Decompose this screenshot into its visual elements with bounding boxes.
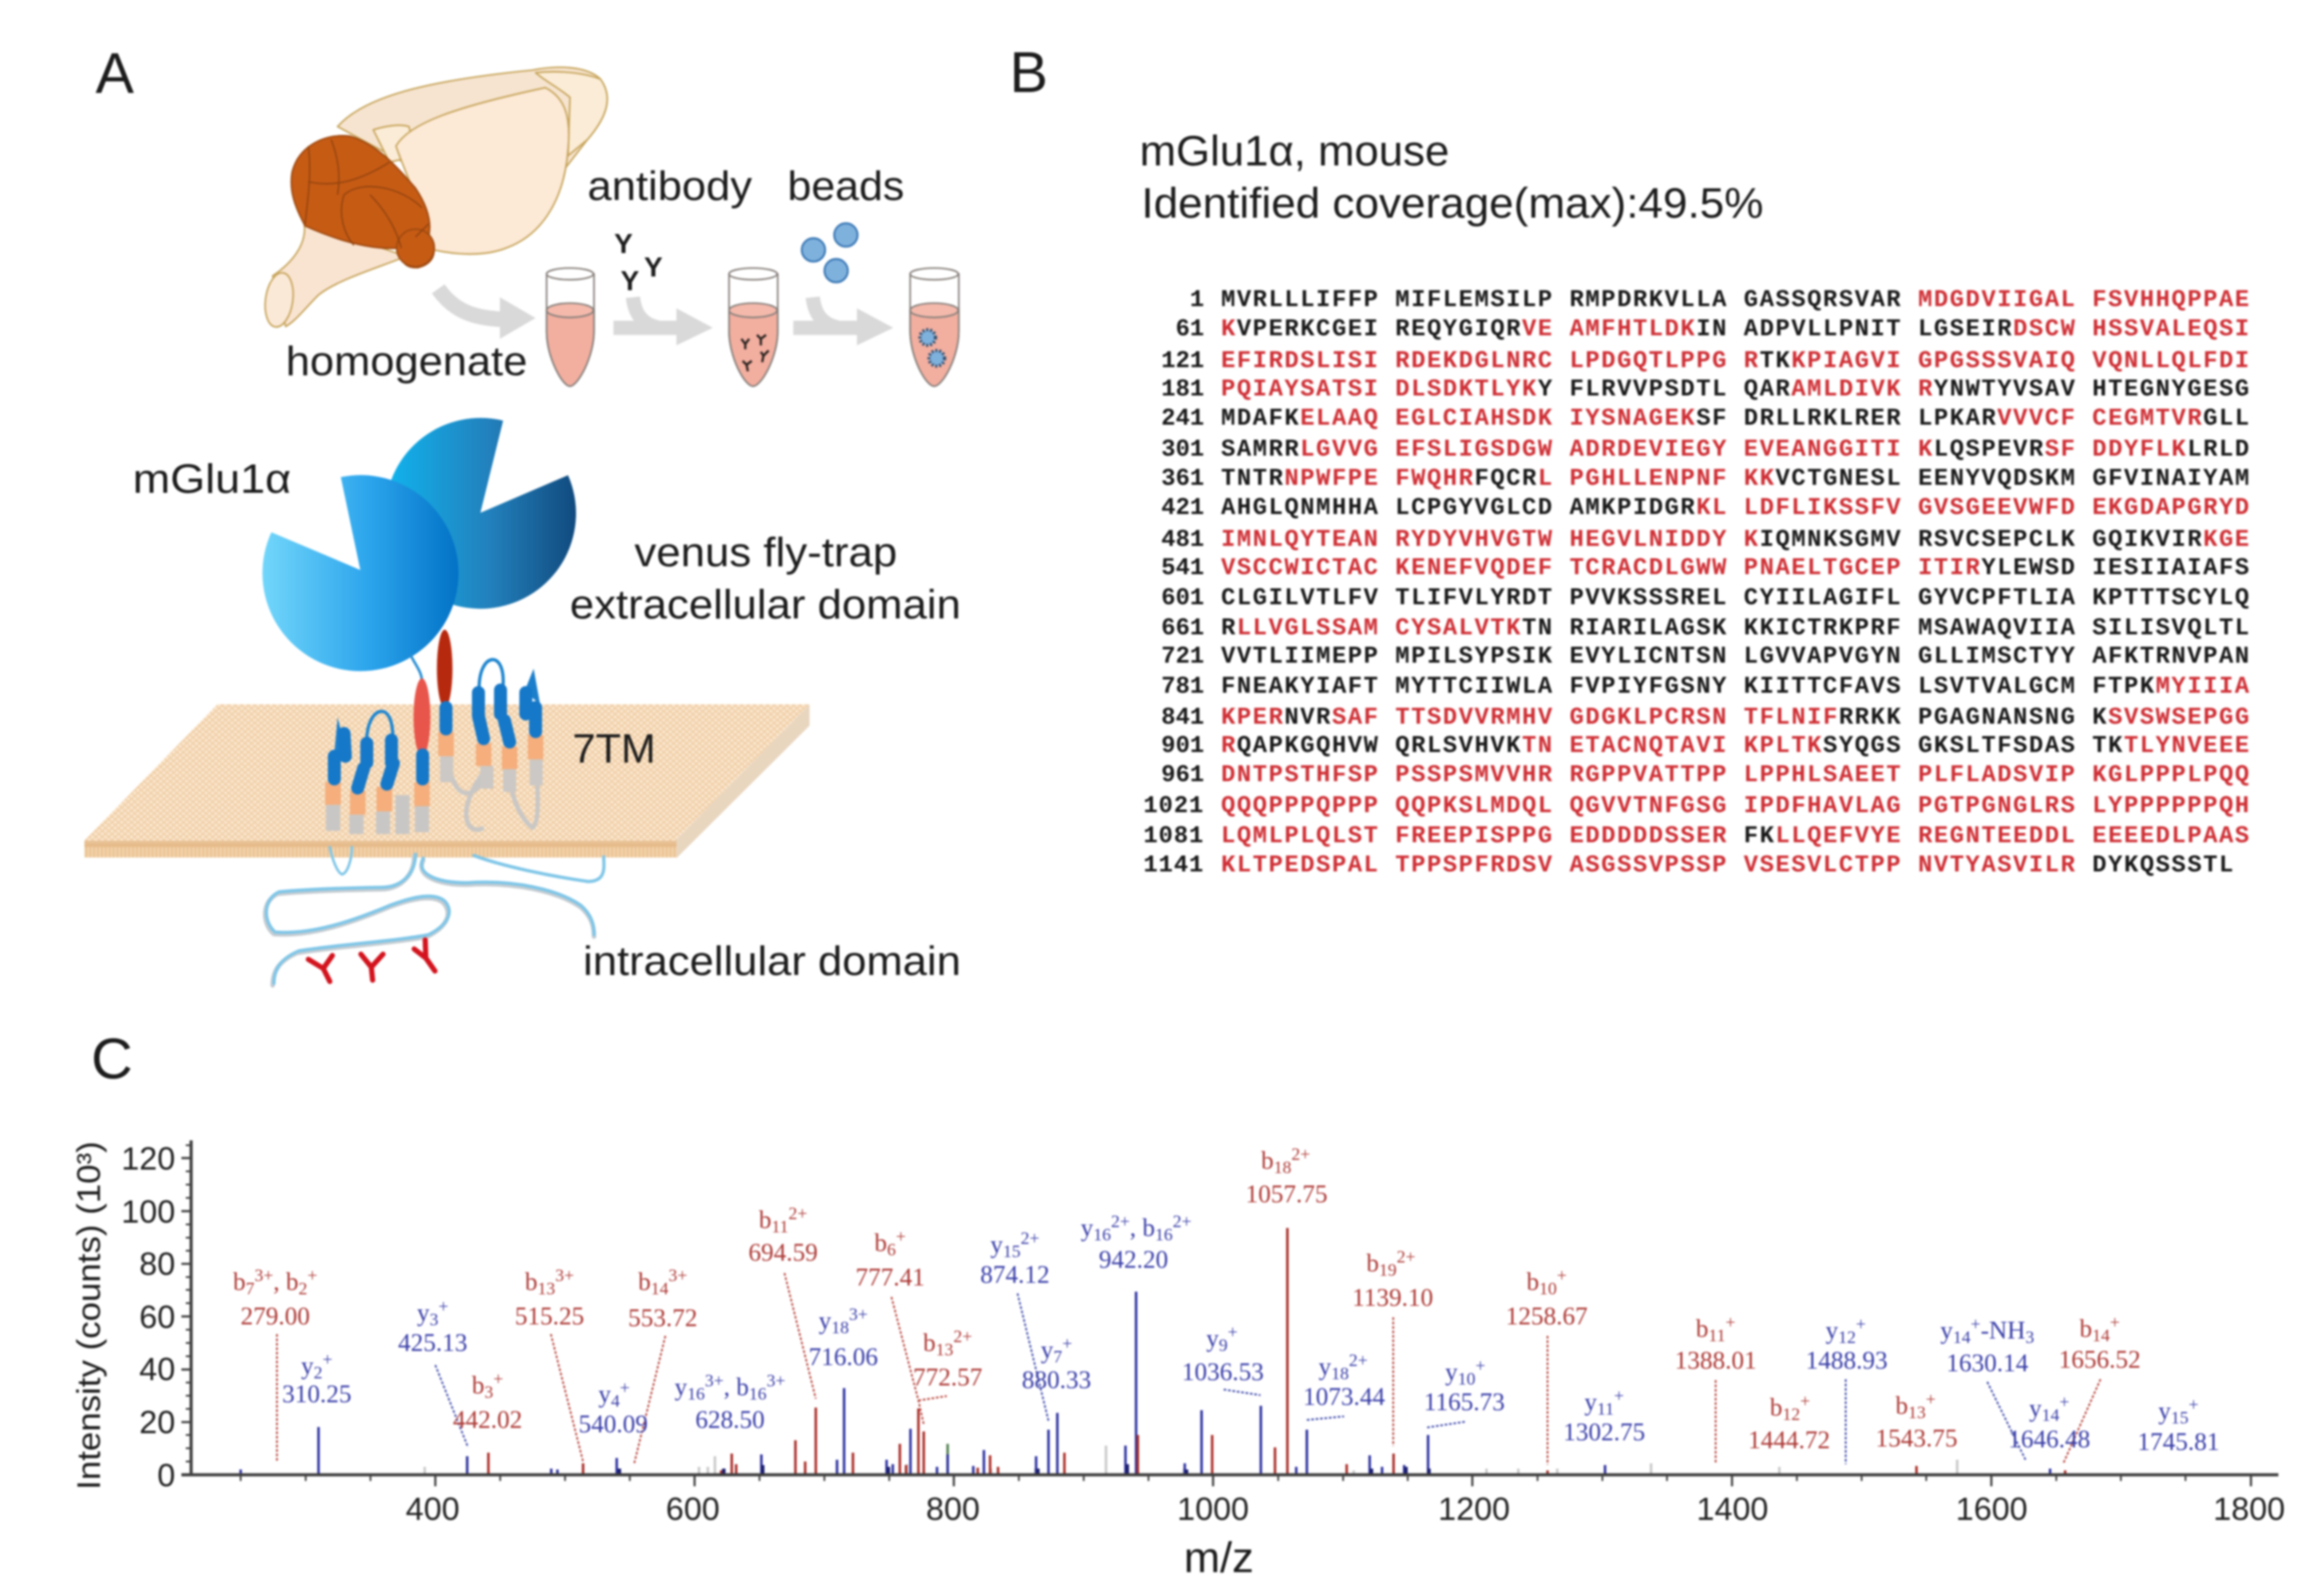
annotations: y ion labels: 18 [831, 1318, 849, 1338]
panel A: immunoprecipitation workflow and receptor [84, 41, 961, 986]
annotations: y ion labels: 1302.75 [1563, 1419, 1645, 1446]
text: beads: beads [787, 163, 904, 209]
chart: x-axis numbers: 1800 [2213, 1491, 2285, 1527]
chart: y-axis numbers: 120 [121, 1140, 175, 1177]
icon: red antibodies on tail [309, 940, 435, 981]
annotations: y ion labels: 716.06 [809, 1344, 878, 1371]
annotations: b ion labels: b [1366, 1250, 1379, 1278]
annotations: y ion labels: 3+ [849, 1305, 868, 1324]
annotations: y ion labels: y [1940, 1317, 1953, 1345]
annotations: b ion labels: 14 [650, 1279, 668, 1299]
annotations: b ion labels [233, 1145, 2140, 1454]
annotations: b ion labels: + [1725, 1313, 1735, 1332]
chart: x-axis numbers [406, 1491, 2285, 1527]
annotations: y ion labels: 11 [1597, 1400, 1614, 1419]
annotations: y ion labels: 15 [1002, 1242, 1020, 1262]
annotations: y ion labels: y [1445, 1359, 1457, 1386]
annotations: b ion labels: 772.57 [913, 1364, 982, 1392]
text block: protein sequence with identified peptides in red: VVTLIIMEPP MPILSYPSIK EVYLICNTSN LGVVAPVGYN GLLIMSCTYY AFKTRNVPAN [1221, 644, 2251, 671]
annotations: b ion labels: 6 [887, 1240, 895, 1260]
annotations: y ion labels: y [1318, 1354, 1331, 1381]
text block: protein sequence with identified peptides in red: LQMLPLQLST FREEPISPPG EDDDDDSSER FKLLQEFVYE REGNTEEDDL EEEEDLPAAS [1221, 824, 2251, 850]
annotations: b ion labels: 14 [2092, 1326, 2109, 1346]
annotations: y ion labels: + [438, 1297, 449, 1316]
annotations: y ion labels: 1036.53 [1182, 1359, 1264, 1386]
annotations: y ion labels: 10 [1457, 1370, 1475, 1389]
diagram: venus fly-trap front lobe [263, 475, 458, 671]
icon: mouse brain [262, 67, 607, 329]
text block: protein sequence with identified peptides in red: CLGILVTLFV TLIFVLYRDT PVVKSSSREL CYIILAGIFL GYVCPFTLIA KPTTTSCYLQ [1221, 586, 2251, 612]
annotations: y ion labels: -NH [1980, 1317, 2025, 1345]
icon: free antibodies: Y [614, 227, 633, 259]
annotations: y ion labels: 1646.48 [2009, 1426, 2090, 1454]
diagram: 7TM helices, right protomer [446, 660, 540, 830]
icon: tube 2 with antibodies [729, 268, 778, 387]
annotations: y ion labels: 4 [611, 1392, 619, 1411]
annotation leader lines: b ions [277, 1273, 2101, 1465]
text: homogenate: homogenate [286, 338, 527, 384]
text block: residue numbers: 301 [1161, 437, 1204, 464]
annotations: b ion labels: 442.02 [453, 1407, 522, 1434]
annotations: y ion labels: , b [724, 1374, 749, 1401]
annotations: b ion labels: b [1526, 1269, 1539, 1296]
annotations: y ion labels: 14 [2041, 1406, 2059, 1425]
text block: residue numbers: 121 [1161, 349, 1204, 375]
text block: residue numbers: 241 [1161, 406, 1204, 433]
annotations: b ion labels: + [1925, 1390, 1936, 1409]
label: panel C letter: C [91, 1026, 133, 1091]
text: antibody: antibody [588, 163, 752, 209]
text block: protein sequence with identified peptides in red: VSCCWICTAC KENEFVQDEF TCRACDLGWW PNAELTGCEP ITIRYLEWSD IESIIAIAFS [1221, 556, 2251, 582]
text block: residue numbers: 1081 [1143, 824, 1204, 850]
diagram: linker and cysteine-rich domains [411, 630, 452, 756]
text block: protein sequence with identified peptides in red: SAMRRLGVVG EFSLIGSDGW ADRDEVIEGY EVEANGGITI KLQSPEVRSF DDYFLKLRLD [1221, 437, 2251, 464]
text block: residue numbers: 181 [1161, 377, 1204, 403]
annotations: b ion labels: 13 [1908, 1403, 1925, 1423]
annotations: b ion labels: 694.59 [749, 1239, 818, 1267]
annotations: b ion labels: 7 [246, 1279, 255, 1299]
annotations: y ion labels: 3+ [766, 1371, 786, 1391]
annotations: b ion labels: + [307, 1266, 318, 1285]
annotations: b ion labels: 1656.52 [2059, 1347, 2140, 1374]
text block: protein sequence with identified peptides in red: MDAFKELAAQ EGLCIAHSDK IYSNAGEKSF DRLLRKLRER LPKARVVVCF CEGMTVRGLL [1221, 406, 2251, 433]
heading: protein name: mGlu1α, mouse [1140, 128, 1449, 175]
annotations: y ion labels: + [2188, 1395, 2199, 1415]
chart: y-axis numbers: 40 [139, 1351, 175, 1387]
text block: residue numbers: 721 [1161, 644, 1204, 671]
heading: coverage: Identified coverage(max):49.5% [1141, 180, 1763, 227]
annotations: y ion labels: + [322, 1350, 333, 1370]
annotations: b ion labels: b [874, 1230, 887, 1257]
chart: x-axis numbers: 1000 [1177, 1491, 1249, 1527]
chart: x-axis numbers: 1400 [1696, 1491, 1769, 1527]
annotations: y ion labels: + [2059, 1393, 2070, 1412]
annotations: b ion labels: 1444.72 [1748, 1427, 1830, 1454]
annotations: b ion labels: 515.25 [515, 1303, 584, 1331]
annotations: y ion labels: + [619, 1378, 630, 1398]
text block: protein sequence with identified peptides in red: EFIRDSLISI RDEKDGLNRC LPDGQTLPPG RTKKPIAGVI GPGSSSVAIQ VQNLLQLFDI [1221, 349, 2251, 375]
text block: protein sequence with identified peptides in red: IMNLQYTEAN RYDYVHVGTW HEGVLNIDDY KIQMNKSGMV RSVCSEPCLK GQIKVIRKGE [1221, 527, 2251, 554]
annotations: b ion labels: 13 [537, 1279, 555, 1299]
text block: residue numbers: 61 [1176, 317, 1204, 343]
text block: protein sequence with identified peptides in red: FNEAKYIAFT MYTTCIIWLA FVPIYFGSNY KIITTCFAVS LSVTVALGCM FTPKMYIIIA [1221, 674, 2251, 701]
annotations: b ion labels: b [1696, 1316, 1709, 1343]
annotations: y ion labels: , b [1130, 1215, 1155, 1242]
panel C: MS/MS spectrum [71, 1026, 2285, 1582]
icon: tube 1 [547, 268, 594, 387]
icon: free antibodies: Y [644, 251, 663, 283]
axis title: x: m/z [1184, 1535, 1254, 1582]
diagram: venus fly-trap back lobe [385, 418, 576, 609]
chart: x-axis numbers: 400 [406, 1491, 459, 1527]
annotations: b ion labels: b [638, 1269, 650, 1296]
annotations: y ion labels: + [1227, 1323, 1238, 1342]
chart: spectrum peaks [241, 1228, 2065, 1475]
annotations: y ion labels: 16 [687, 1385, 705, 1404]
chart: y-axis numbers: 80 [139, 1246, 175, 1282]
annotations: b ion labels: 10 [1539, 1279, 1556, 1299]
annotations: b ion labels: 777.41 [856, 1264, 925, 1292]
text block: residue numbers: 481 [1161, 527, 1204, 554]
annotations: y ion labels: y [2158, 1398, 2170, 1425]
annotations: b ion labels: 11 [772, 1217, 788, 1237]
text block: residue numbers: 1 [1190, 288, 1204, 314]
annotations: b ion labels: 1388.01 [1675, 1347, 1756, 1375]
annotations: b ion labels: b [923, 1330, 935, 1357]
annotations: b ion labels: + [1800, 1392, 1810, 1411]
label: panel A letter: A [96, 41, 134, 105]
annotations: y ion labels: y [1041, 1337, 1053, 1364]
annotations: b ion labels: 553.72 [628, 1305, 697, 1332]
text block: residue numbers: 1141 [1143, 853, 1204, 879]
annotations: b ion labels: + [2109, 1313, 2120, 1332]
annotations: b ion labels: 12 [1782, 1405, 1800, 1424]
annotations: y ion labels: 874.12 [980, 1262, 1049, 1289]
diagram: intracellular tails [265, 847, 604, 986]
annotations: b ion labels: 1543.75 [1876, 1425, 1957, 1453]
annotations: b ion labels: 3+ [668, 1266, 687, 1285]
annotations: b ion labels: 2+ [953, 1327, 972, 1347]
annotations: y ion labels: 14 [1953, 1328, 1970, 1347]
text block: protein sequence with identified peptides in red: AHGLQNMHHA LCPGYVGLCD AMKPIDGRKL LDFLIKSSFV GVSGEEVWFD EKGDAPGRYD [1221, 495, 2251, 522]
annotations: y ion labels: y [990, 1232, 1002, 1259]
icon: free beads [802, 223, 857, 282]
axis title: y: Intensity (counts) (10³) [71, 1141, 107, 1490]
text block: protein sequence with identified peptides in red: KVPERKCGEI REQYGIQRVE AMFHTLDKIN ADPVLLPNIT LGSEIRDSCW HSSVALEQSI [1221, 317, 2251, 343]
chart: x-axis numbers: 1600 [1955, 1491, 2028, 1527]
annotations: y ion labels: y [301, 1353, 313, 1380]
annotations: y ion labels: 1630.14 [1947, 1350, 2028, 1377]
annotations: y ion labels: 942.20 [1099, 1247, 1168, 1274]
annotations: y ion labels: 2+ [1020, 1229, 1040, 1248]
annotations: y ion labels: 16 [1094, 1225, 1111, 1245]
text block: residue numbers: 961 [1161, 763, 1204, 789]
annotations: y ion labels: 1073.44 [1303, 1384, 1385, 1411]
annotations: b ion labels: 1258.67 [1506, 1303, 1587, 1331]
annotations: b ion labels: 3+ [255, 1266, 273, 1285]
annotations: y ion labels: 15 [2170, 1408, 2188, 1428]
annotations: y ion labels: + [1970, 1315, 1980, 1334]
annotations: b ion labels: 18 [1273, 1158, 1291, 1178]
annotations: b ion labels: b [1895, 1393, 1908, 1420]
annotations: b ion labels: 2+ [1291, 1145, 1310, 1164]
text: intracellular domain: intracellular domain [583, 938, 961, 984]
annotations: y ion labels: + [1614, 1386, 1624, 1406]
text block: residue numbers: 661 [1161, 616, 1204, 642]
annotations: y ion labels: y [1825, 1317, 1838, 1345]
text block: protein sequence with identified peptides in red: MVRLLLIFFP MIFLEMSILP RMPDRKVLLA GASSQRSVAR MDGDVIIGAL FSVHHQPPAE [1221, 288, 2251, 314]
annotations: y ion labels: y [417, 1300, 429, 1327]
text block: protein sequence with identified peptides in red: RQAPKGQHVW QRLSVHVKTN ETACNQTAVI KPLTKSYQGS GKSLTFSDAS TKTLYNVEEE [1221, 733, 2251, 760]
annotations: b ion labels: b [472, 1372, 484, 1400]
annotations: b ion labels: 2+ [1396, 1247, 1416, 1267]
annotations: b ion labels: b [525, 1269, 537, 1296]
annotations: b ion labels: + [895, 1227, 906, 1247]
text: mGlu1 alpha: mGlu1α [133, 456, 291, 502]
annotations: y ion labels: + [1475, 1356, 1486, 1376]
icon: free antibodies: Y [620, 265, 639, 296]
annotations: y ion labels: 880.33 [1022, 1367, 1091, 1394]
chart: x-axis numbers: 800 [926, 1491, 979, 1527]
annotations: y ion labels: y [598, 1381, 611, 1408]
diagram: lipid membrane [84, 704, 810, 858]
annotations: b ion labels: + [493, 1370, 503, 1389]
annotations: b ion labels: b [1770, 1394, 1782, 1422]
annotations: b ion labels: , b [273, 1269, 298, 1296]
chart: x-axis numbers: 1200 [1438, 1491, 1510, 1527]
annotations: y ion labels: 425.13 [398, 1330, 467, 1357]
annotations: y ion labels: 1745.81 [2138, 1429, 2219, 1456]
annotations: b ion labels: 11 [1709, 1326, 1725, 1346]
illustration: panel A drawing [84, 67, 959, 986]
annotations: y ion labels: y [1585, 1389, 1597, 1416]
annotations: y ion labels: 628.50 [695, 1407, 764, 1434]
annotations: y ion labels: 1488.93 [1806, 1347, 1887, 1375]
annotations: b ion labels: 2+ [788, 1204, 807, 1224]
annotations: b ion labels: 1057.75 [1246, 1181, 1327, 1209]
text block: residue numbers: 421 [1161, 495, 1204, 522]
chart: x-axis numbers: 600 [666, 1491, 719, 1527]
annotations: y ion labels: 2+ [1348, 1351, 1368, 1370]
annotations: y ion labels: 1165.73 [1424, 1389, 1505, 1416]
annotations: b ion labels: 1139.10 [1352, 1285, 1433, 1312]
annotations: b ion labels: b [2079, 1316, 2092, 1343]
annotations: y ion labels: y [2029, 1395, 2041, 1423]
chart: axes and tick marks [181, 1140, 2278, 1486]
annotations: b ion labels: b [759, 1207, 772, 1234]
text block: protein sequence with identified peptides in red: KPERNVRSAF TTSDVVRMHV GDGKLPCRSN TFLNIFRRKK PGAGNANSNG KSVSWSEPGG [1221, 705, 2251, 732]
annotations: y ion labels: y [818, 1308, 831, 1335]
annotations: y ion labels: 2+ [1111, 1212, 1130, 1232]
annotations: y ion labels: y [674, 1374, 687, 1401]
chart: y-axis numbers: 20 [139, 1404, 175, 1440]
annotations: b ion labels: 3 [484, 1383, 493, 1402]
annotations: y ion labels: 540.09 [579, 1411, 648, 1439]
annotations: y ion labels: 16 [749, 1385, 766, 1404]
text block: residue numbers: 361 [1161, 466, 1204, 493]
text block: protein sequence with identified peptides in red: DNTPSTHFSP PSSPSMVVHR RGPPVATTPP LPPHLSAEET PLFLADSVIP KGLPPPLPQQ [1221, 763, 2251, 789]
text block: residue numbers: 841 [1161, 705, 1204, 732]
arrow: homogenate to tube [438, 288, 535, 339]
text: 7TM: 7TM [572, 725, 656, 771]
annotations: y ion labels: 2 [313, 1363, 322, 1383]
annotations: y ion labels: 310.25 [282, 1381, 351, 1408]
text block: residue numbers: 541 [1161, 556, 1204, 582]
annotations: y ion labels: + [1855, 1315, 1866, 1334]
annotations: y ion labels: 9 [1218, 1336, 1227, 1355]
annotations: b ion labels: + [1556, 1266, 1567, 1285]
annotations: y ion labels: 3+ [705, 1371, 724, 1391]
text: extracellular domain: extracellular domain [570, 581, 961, 627]
annotations: b ion labels: b [1261, 1147, 1273, 1175]
annotations: b ion labels: b [233, 1269, 246, 1296]
text block: protein sequence with identified peptides in red: TNTRNPWFPE FWQHRFQCRL PGHLLENPNF KKVCTGNESL EENYVQDSKM GFVINAIYAM [1221, 466, 2251, 493]
text block: protein sequence with identified peptides in red: RLLVGLSSAM CYSALVTKTN RIARILAGSK KKICTRKPRF MSAWAQVIIA SILISVQLTL [1221, 616, 2251, 642]
panel B: sequence coverage [1010, 40, 2251, 879]
label: panel B letter: B [1010, 40, 1048, 104]
chart: y-axis numbers [121, 1140, 175, 1493]
annotations: b ion labels: 13 [935, 1340, 953, 1360]
annotations: b ion labels: 3+ [555, 1266, 574, 1285]
text block: residue numbers: 901 [1161, 733, 1204, 760]
annotations: b ion labels: 2 [298, 1279, 307, 1299]
diagram: 7TM helices, left protomer [333, 711, 423, 834]
text block: protein sequence with identified peptides in red: PQIAYSATSI DLSDKTLYKY FLRVVPSDTL QARAMLDIVK RYNWTYVSAV HTEGNYGESG [1221, 377, 2251, 403]
chart: y-axis numbers: 100 [121, 1193, 175, 1230]
annotations: b ion labels: 19 [1379, 1261, 1396, 1280]
annotations: y ion labels: 16 [1155, 1225, 1172, 1245]
annotations: y ion labels: y [1080, 1215, 1094, 1242]
chart: y-axis numbers: 60 [139, 1299, 175, 1335]
annotations: y ion labels: 3 [429, 1310, 438, 1330]
annotations: y ion labels: 3 [2025, 1328, 2034, 1347]
annotations: y ion labels: 12 [1838, 1328, 1855, 1347]
annotation leader lines: y ions [435, 1293, 2026, 1464]
icon: tube 3 with beads [910, 268, 959, 387]
text block: residue numbers [1143, 288, 1204, 879]
chart: y-axis numbers: 0 [157, 1457, 175, 1493]
annotations: y ion labels: 18 [1331, 1364, 1348, 1384]
text: venus fly-trap: venus fly-trap [634, 529, 897, 575]
arrow: beads addition [794, 297, 894, 345]
text block: protein sequence with identified peptides in red [1221, 288, 2251, 879]
text block: residue numbers: 1021 [1143, 794, 1204, 820]
annotations: b ion labels: 279.00 [241, 1303, 310, 1331]
arrow: antibody addition [613, 297, 713, 345]
annotations: y ion labels [282, 1212, 2219, 1456]
text block: residue numbers: 601 [1161, 586, 1204, 612]
icon: free antibodies [614, 227, 663, 296]
annotations: y ion labels: 2+ [1172, 1212, 1192, 1232]
text block: residue numbers: 781 [1161, 674, 1204, 701]
annotations: y ion labels: 7 [1053, 1347, 1062, 1367]
text block: protein sequence with identified peptides in red: QQQPPPQPPP QQPKSLMDQL QGVVTNFGSG IPDFHAVLAG PGTPGNGLRS LYPPPPPPQH [1221, 794, 2251, 820]
annotations: y ion labels: + [1062, 1334, 1072, 1354]
text block: protein sequence with identified peptides in red: KLTPEDSPAL TPPSPFRDSV ASGSSVPSSP VSESVLCTPP NVTYASVILR DYKQSSSTL [1221, 853, 2235, 879]
annotations: y ion labels: y [1206, 1325, 1218, 1353]
